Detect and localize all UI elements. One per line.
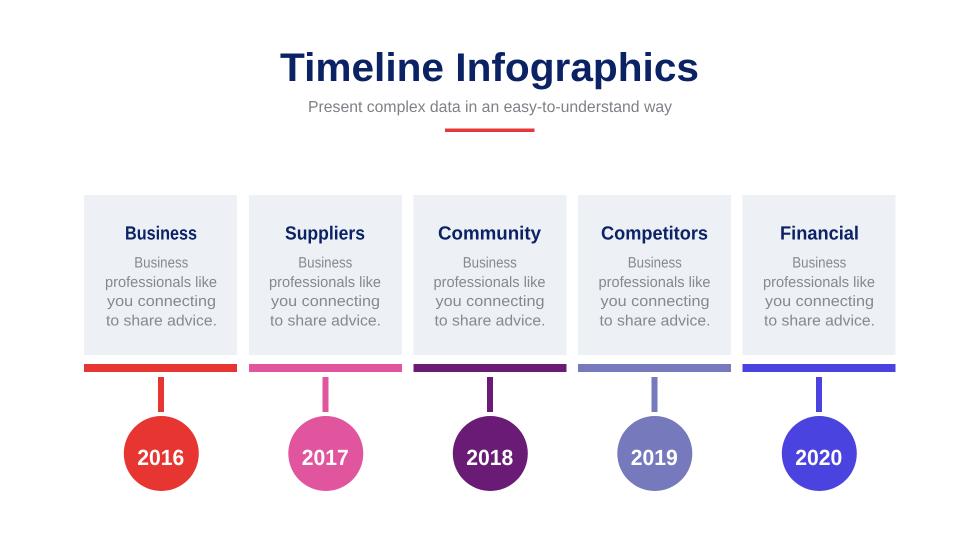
body text: to share advice. bbox=[600, 312, 710, 330]
card: Competitors bbox=[578, 195, 731, 355]
connector bbox=[322, 377, 328, 412]
card: Community bbox=[414, 195, 566, 355]
body text: you connecting bbox=[436, 293, 544, 310]
connector bbox=[487, 377, 493, 412]
body text: professionals like bbox=[434, 274, 546, 291]
body text: professionals like bbox=[763, 274, 875, 291]
body text: Business bbox=[628, 254, 682, 272]
year badge: 2017 bbox=[288, 416, 363, 491]
body text: you connecting bbox=[107, 293, 216, 310]
body text: you connecting bbox=[271, 293, 380, 310]
body text: Business bbox=[298, 254, 352, 272]
body text: professionals like bbox=[105, 274, 217, 291]
timeline bar bbox=[414, 364, 566, 372]
body text: professionals like bbox=[598, 274, 710, 291]
connector bbox=[652, 377, 658, 412]
body text bbox=[269, 254, 381, 330]
body text: to share advice. bbox=[764, 312, 875, 330]
body text bbox=[763, 254, 875, 330]
heading: Business: Business bbox=[125, 224, 197, 244]
title underline bbox=[445, 128, 534, 132]
card: Financial bbox=[742, 195, 896, 355]
heading: Suppliers: Suppliers bbox=[285, 224, 365, 244]
year badge: 2019 bbox=[617, 416, 692, 491]
card: Business bbox=[84, 195, 237, 355]
timeline bar bbox=[578, 364, 731, 372]
heading: Competitors: Competitors bbox=[601, 224, 708, 244]
timeline bar bbox=[249, 364, 402, 372]
column: Competitors 2019 bbox=[578, 195, 731, 491]
body text: Business bbox=[134, 254, 188, 272]
column: Business 2016 bbox=[84, 195, 237, 491]
year badge: 2019: 2019 bbox=[631, 445, 678, 470]
heading: Financial: Financial bbox=[780, 224, 859, 244]
body text: you connecting bbox=[600, 293, 710, 310]
body text bbox=[598, 254, 710, 330]
body text bbox=[105, 254, 217, 330]
body text: professionals like bbox=[269, 274, 381, 291]
body text: you connecting bbox=[765, 293, 874, 310]
year badge: 2018 bbox=[453, 416, 528, 491]
body text: to share advice. bbox=[434, 312, 546, 330]
heading: Community: Community bbox=[438, 224, 541, 244]
card: Suppliers bbox=[249, 195, 402, 355]
connector bbox=[158, 377, 164, 412]
year badge: 2016: 2016 bbox=[137, 445, 184, 470]
timeline bar bbox=[742, 364, 896, 372]
column: Suppliers 2017 bbox=[249, 195, 402, 491]
body text: Business bbox=[792, 254, 846, 272]
subtitle: Present complex data in an easy-to-understand way bbox=[308, 99, 672, 116]
year badge: 2018: 2018 bbox=[466, 445, 513, 470]
body text: to share advice. bbox=[106, 312, 217, 330]
body text: Business bbox=[463, 254, 517, 272]
column: Community 2018 bbox=[414, 195, 566, 491]
connector bbox=[816, 377, 822, 412]
timeline bar bbox=[84, 364, 237, 372]
year badge: 2020 bbox=[782, 416, 857, 491]
body text: to share advice. bbox=[270, 312, 381, 330]
year badge: 2016 bbox=[124, 416, 199, 491]
year badge: 2017: 2017 bbox=[302, 445, 349, 470]
year badge: 2020: 2020 bbox=[795, 445, 842, 470]
title: Timeline Infographics bbox=[280, 46, 699, 90]
body text bbox=[434, 254, 546, 330]
column: Financial 2020 bbox=[742, 195, 896, 491]
